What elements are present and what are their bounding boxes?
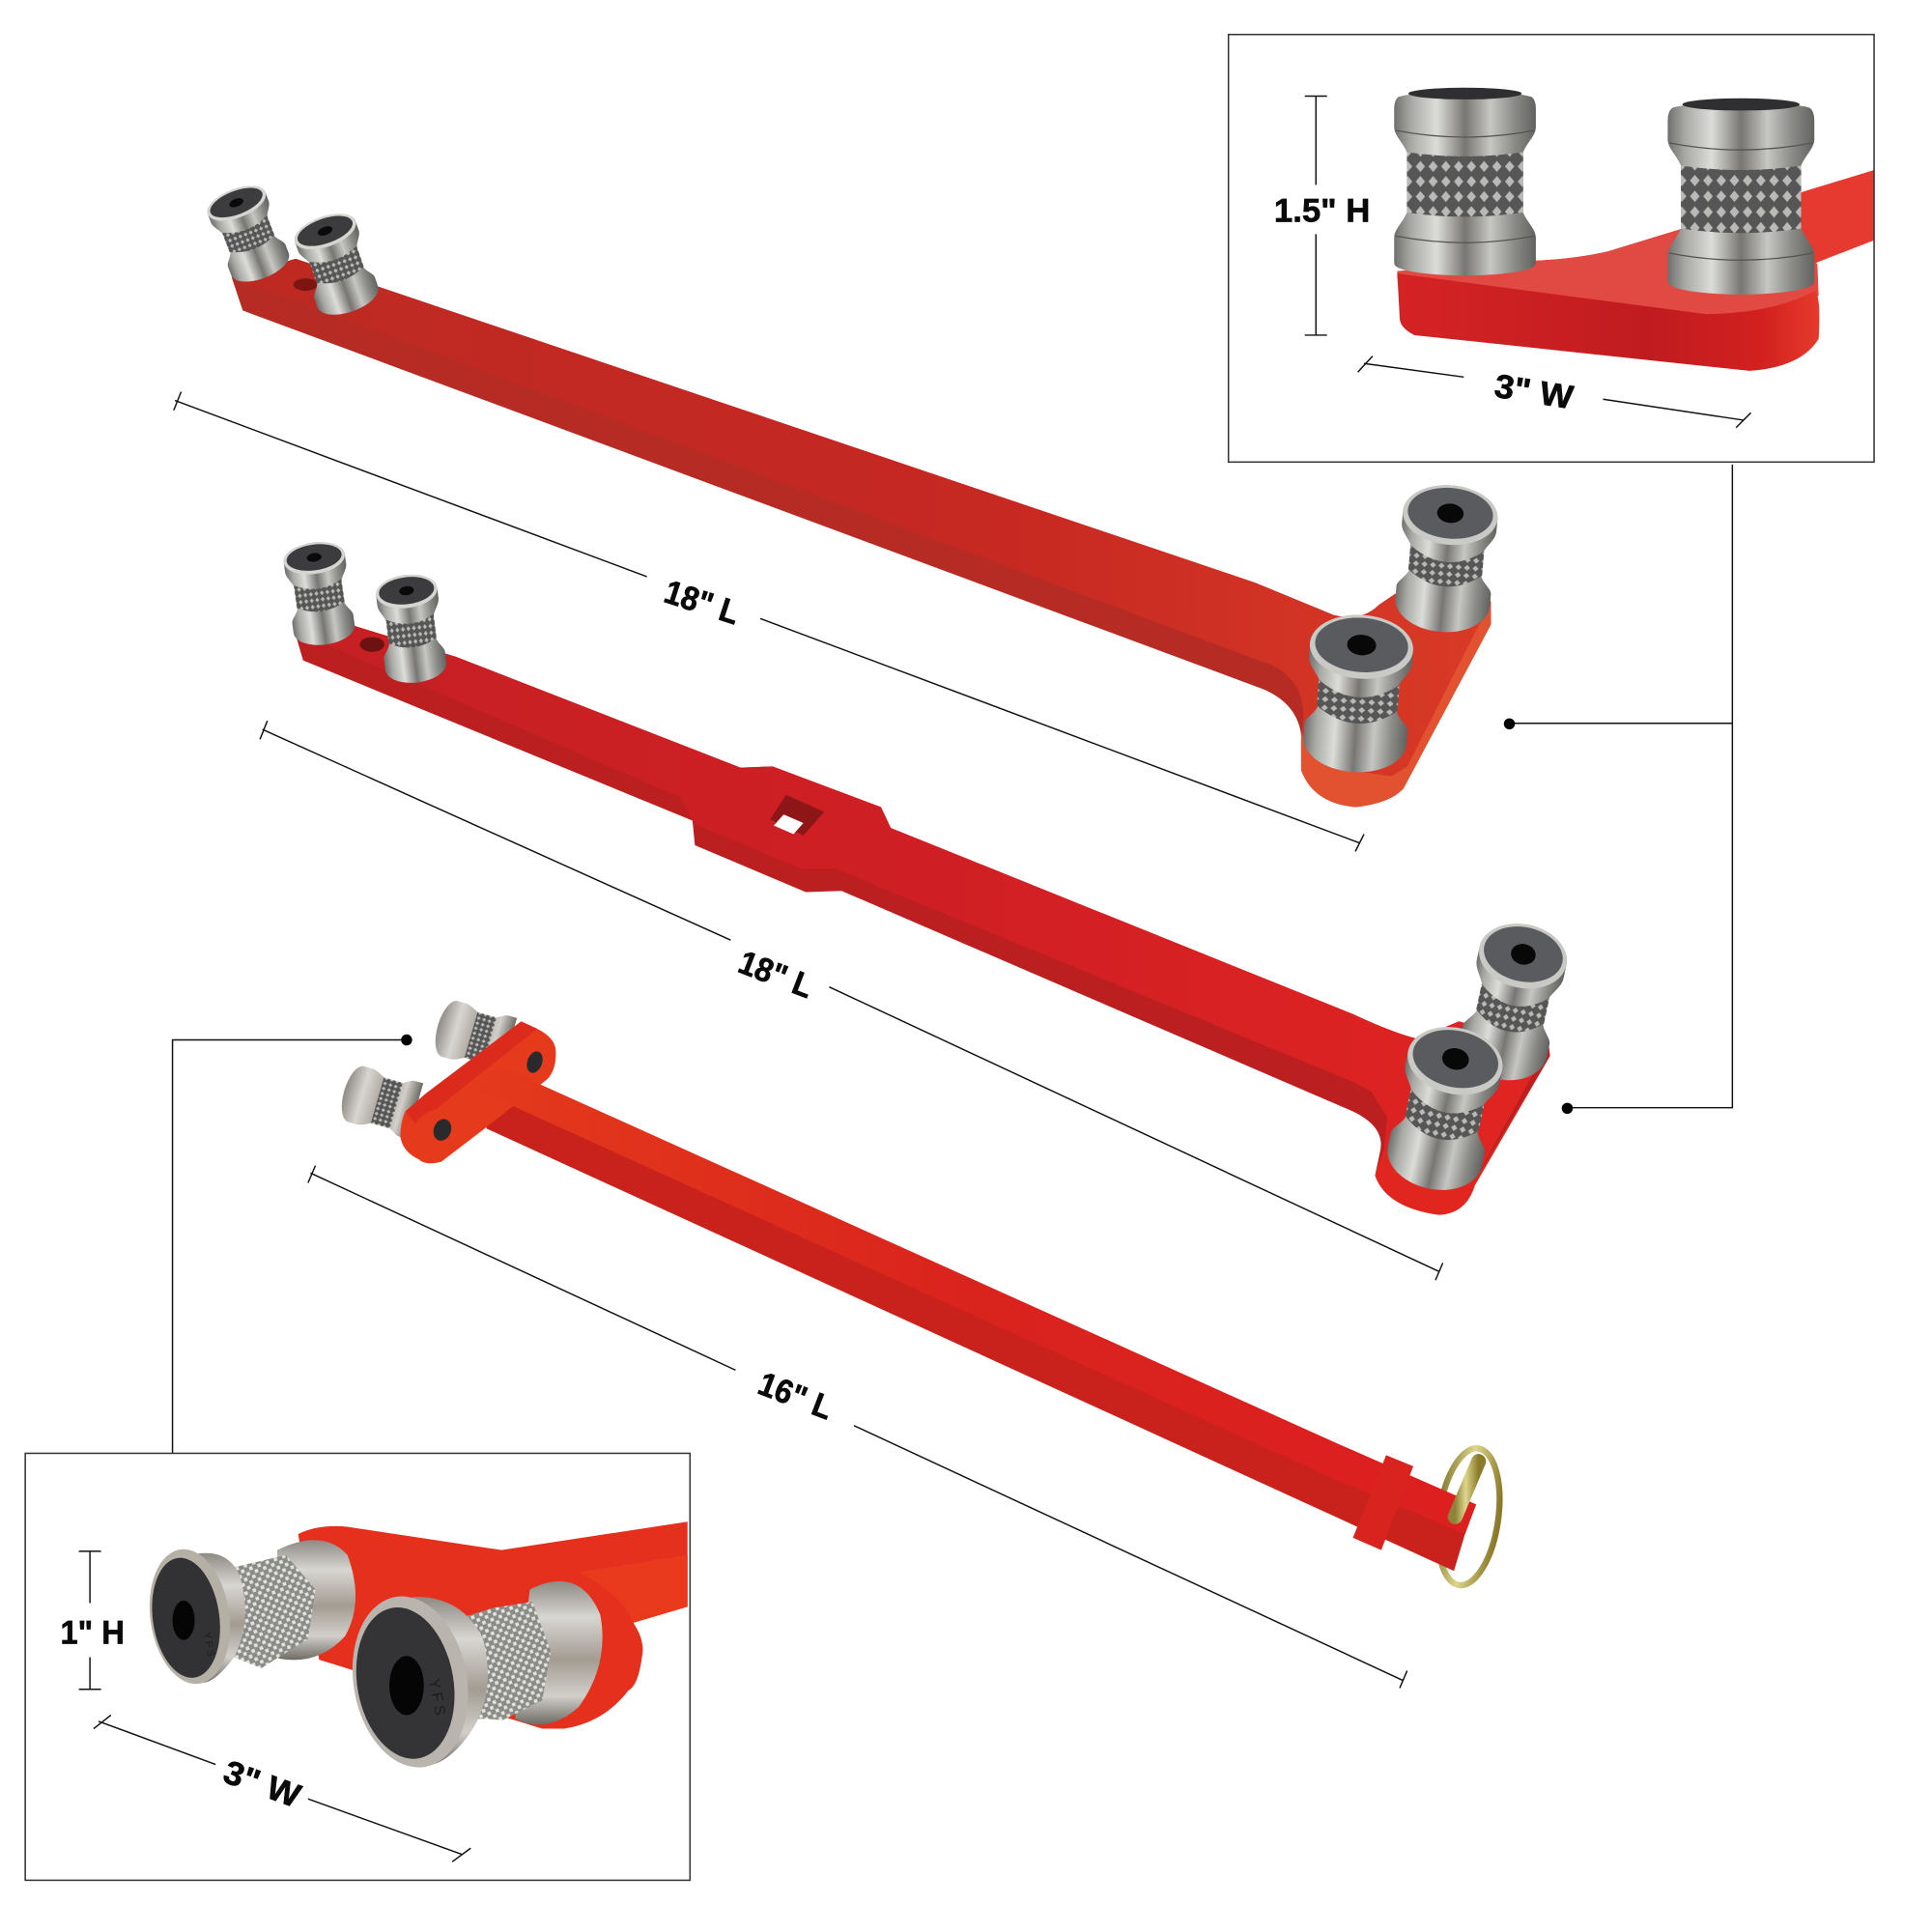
panel: bottom inset, 1 inch pins	[25, 1453, 690, 1880]
arm	[1509, 170, 1874, 314]
height dimension	[60, 1551, 125, 1690]
ring pin loop	[1430, 1444, 1508, 1589]
cross plate	[401, 1021, 555, 1163]
bolt holes	[431, 1049, 546, 1143]
dimension: top bar length	[174, 392, 1364, 851]
panel: top inset, 1.5 inch pins	[1229, 35, 1874, 462]
pin: far left	[203, 179, 294, 289]
shaft top face	[473, 1065, 1476, 1534]
callout connector: left, linking bottom bar to bottom inset	[173, 1035, 412, 1453]
dimension: middle bar length	[260, 721, 1443, 1280]
plate edge highlight	[406, 1021, 537, 1123]
callout connector: right, linking two bars to top inset	[1504, 465, 1732, 1114]
bar side face	[295, 610, 1550, 1215]
bar top face	[295, 610, 1548, 1190]
plate top face	[1397, 215, 1819, 321]
width dimension	[1358, 356, 1750, 428]
bolt stamp: Y F S	[425, 1678, 448, 1717]
inset frame	[1229, 35, 1874, 462]
cross plate and arm	[298, 1521, 688, 1729]
collar	[1353, 1455, 1413, 1550]
middle bar: 18 inch bar with square socket	[281, 538, 1573, 1215]
width dimension	[94, 1716, 470, 1861]
back pin	[141, 1540, 355, 1690]
pin: near left	[374, 571, 448, 686]
bottom bar: 16 inch bar with cross plate and ring pin	[336, 998, 1508, 1589]
pin: back	[430, 998, 517, 1073]
pin: left	[1394, 88, 1536, 275]
square socket	[770, 795, 824, 836]
ring pin shaft	[1455, 1462, 1479, 1517]
pin: right	[1667, 99, 1814, 295]
pin: front	[336, 1063, 423, 1139]
height dimension: 1" H	[60, 1615, 125, 1652]
bar side face	[232, 259, 1491, 807]
pin: head front	[1301, 611, 1415, 776]
height dimension	[1274, 96, 1370, 335]
dimension: bottom bar length	[308, 1166, 1407, 1688]
height dimension: 1.5" H	[1274, 193, 1370, 230]
front pin	[339, 1581, 603, 1776]
pin: head back	[1393, 481, 1500, 636]
pin: head back	[1454, 916, 1573, 1088]
mounting hole	[359, 637, 384, 652]
pin: near left	[290, 207, 383, 322]
shaft side face	[473, 1088, 1476, 1571]
bolt stamp: Y F S	[201, 1632, 215, 1658]
pin: far left	[281, 538, 356, 649]
inset frame	[25, 1453, 690, 1880]
width dimension: 3" W	[1492, 368, 1577, 416]
head side face	[1301, 601, 1491, 807]
top bar: 18 inch straight bar	[203, 179, 1500, 807]
label: 18" L	[660, 574, 744, 632]
label: 16" L	[753, 1366, 838, 1427]
head side face	[1375, 1056, 1550, 1215]
width dimension: 3" W	[218, 1753, 305, 1815]
plate front face	[1397, 273, 1819, 371]
arm lower face	[579, 1555, 688, 1623]
bar top face	[232, 259, 1491, 777]
label: 18" L	[733, 944, 818, 1006]
pin: head front	[1381, 1018, 1509, 1199]
mounting hole	[294, 278, 318, 291]
